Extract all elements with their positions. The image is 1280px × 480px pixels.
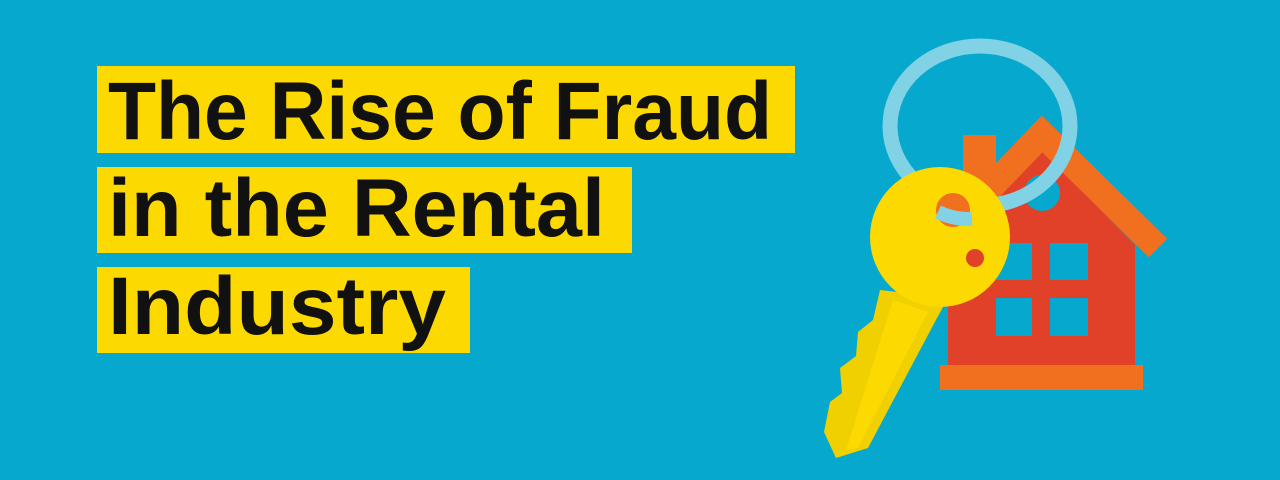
title line 3: Industry xyxy=(108,261,446,352)
title line 1: The Rise of Fraud xyxy=(108,66,772,157)
key ring front segment xyxy=(938,212,972,219)
title xyxy=(97,66,795,353)
house xyxy=(940,134,1158,390)
illustration: key and house xyxy=(824,46,1158,458)
key xyxy=(824,167,1010,458)
key ring xyxy=(890,46,1070,206)
title line 2: in the Rental xyxy=(108,163,605,254)
